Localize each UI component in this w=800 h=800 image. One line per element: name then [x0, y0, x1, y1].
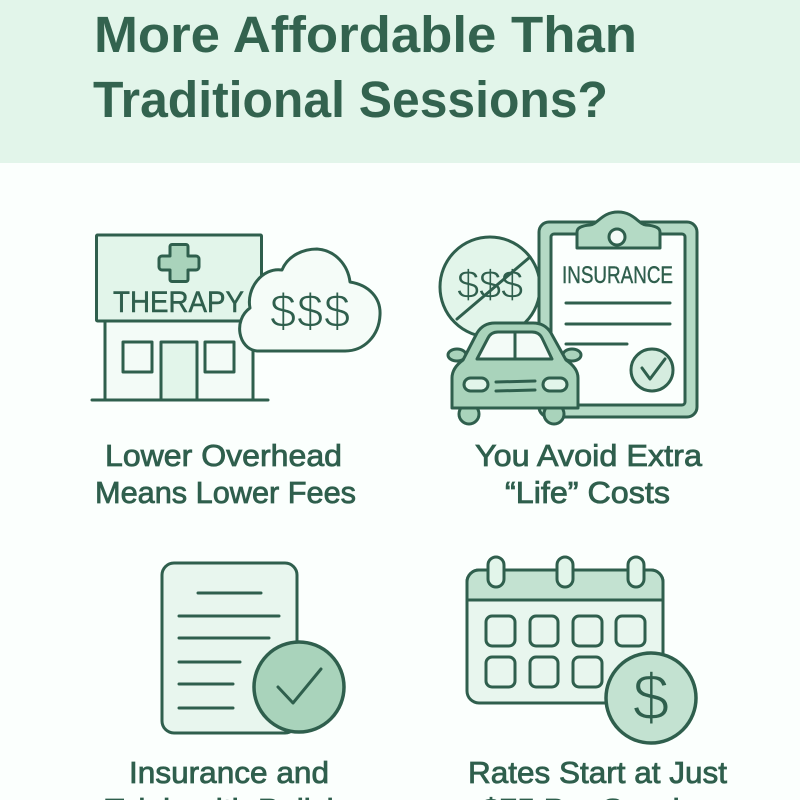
label: rates: Rates Start at Just [468, 755, 727, 790]
panel: extra life costs [440, 212, 703, 510]
icon: insurance clipboard, crossed dollars and car: INSURANCE [562, 262, 673, 289]
title: Traditional Sessions? [93, 71, 608, 128]
label: insurance and telehealth: Insurance and [129, 755, 329, 790]
icon: insurance clipboard, crossed dollars and car [440, 212, 697, 424]
icon: therapy building with cloud of dollars: $$$ [270, 284, 350, 337]
panel: lower overhead [92, 235, 380, 510]
icon: therapy building with cloud of dollars: THERAPY [113, 286, 244, 319]
panel: insurance and telehealth [105, 563, 367, 800]
icon: therapy building with cloud of dollars [92, 235, 380, 400]
label: insurance and telehealth [105, 755, 367, 800]
header band [0, 0, 800, 163]
icon: calendar with dollar coin [467, 557, 696, 743]
title [93, 6, 637, 128]
label: lower overhead: Lower Overhead [105, 438, 342, 473]
label: lower overhead: Means Lower Fees [95, 475, 356, 510]
title: More Affordable Than [94, 6, 637, 63]
icon: insurance clipboard, crossed dollars and car: $$$ [457, 263, 523, 307]
label: lower overhead [95, 438, 356, 510]
label: extra life costs: “Life” Costs [505, 475, 670, 510]
label: extra life costs [475, 438, 703, 510]
icon: document with check badge [162, 563, 344, 733]
label: extra life costs: You Avoid Extra [475, 438, 703, 473]
icon: calendar with dollar coin: $ [633, 660, 669, 734]
panel: rates [467, 557, 727, 800]
